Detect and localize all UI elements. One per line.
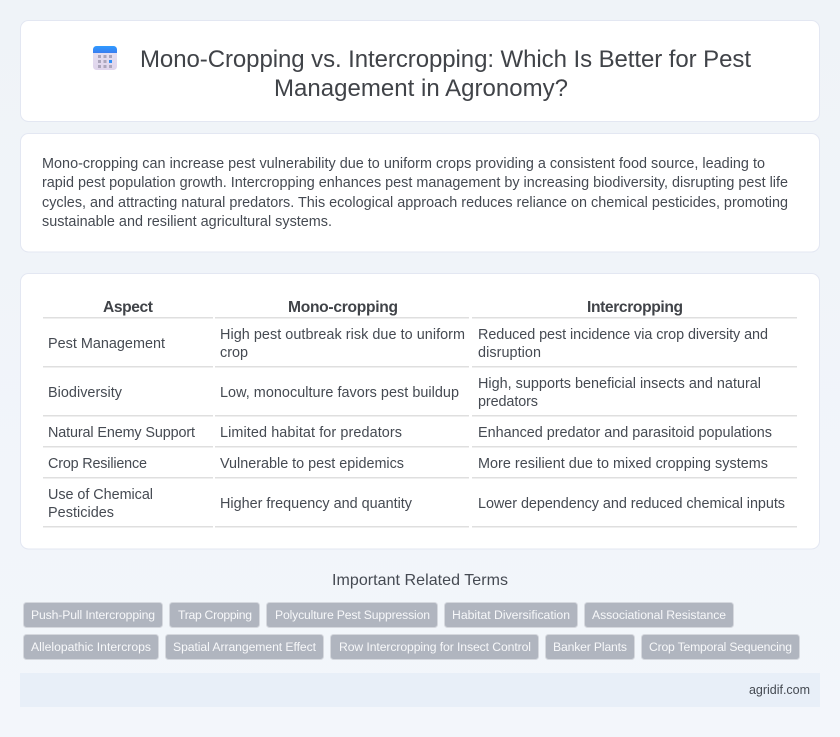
- table row: pest management: crop: [220, 345, 248, 361]
- text block: summary paragraph: sustainable and resilient agricultural systems.: [42, 214, 332, 230]
- table row: natural enemy support: Enhanced predator and parasitoid populations: [478, 425, 772, 441]
- tag list: related terms: Row Intercropping for Insect Control: [339, 640, 531, 654]
- title: Mono-Cropping vs. Intercropping: Which Is Better for Pest: [140, 46, 751, 73]
- tag list: related terms: Allelopathic Intercrops: [31, 640, 151, 654]
- table row: pest management: High pest outbreak risk due to uniform: [220, 327, 465, 343]
- table header row: Intercropping: [587, 299, 683, 316]
- table row: biodiversity: Low, monoculture favors pest buildup: [220, 385, 459, 401]
- table header row: [103, 299, 683, 316]
- table row: pest management: Pest Management: [48, 336, 165, 352]
- title: [140, 46, 751, 102]
- table header row: Aspect: [103, 299, 153, 316]
- panel: title header: [20, 20, 820, 122]
- table row: pest management: [48, 327, 768, 361]
- table row: chemical pesticides: Use of Chemical: [48, 487, 153, 503]
- table row: chemical pesticides: Higher frequency and quantity: [220, 496, 413, 512]
- tag list: related terms: Push-Pull Intercropping: [31, 608, 155, 622]
- footer: [20, 673, 820, 707]
- title: Management in Agronomy?: [274, 75, 568, 102]
- table row: natural enemy support: Limited habitat for predators: [220, 425, 402, 441]
- tag list: related terms: [24, 602, 800, 660]
- heading: important related terms: Important Related Terms: [332, 572, 508, 589]
- table header row: Mono-cropping: [288, 299, 398, 316]
- panel: comparison table: [20, 274, 820, 549]
- text block: summary paragraph: rapid pest population growth. Intercropping enhances pest management by increasing biodiversity, disrupting pest life: [42, 175, 788, 191]
- table row: biodiversity: Biodiversity: [48, 385, 123, 401]
- table row: chemical pesticides: Pesticides: [48, 505, 114, 521]
- tag list: related terms: Spatial Arrangement Effect: [173, 640, 317, 654]
- table row: natural enemy support: Natural Enemy Support: [48, 425, 195, 441]
- table row: biodiversity: High, supports beneficial insects and natural: [478, 376, 761, 392]
- text block: summary paragraph: Mono-cropping can increase pest vulnerability due to uniform crops providing a consistent food source, leading to: [42, 156, 765, 172]
- tag list: related terms: Banker Plants: [553, 640, 627, 654]
- tag list: related terms: Associational Resistance: [592, 608, 726, 622]
- text block: summary paragraph: cycles, and attracting natural predators. This ecological approach reduces reliance on chemical pesticides, promoting: [42, 195, 788, 211]
- table row: chemical pesticides: Lower dependency and reduced chemical inputs: [478, 496, 785, 512]
- icon: calendar: [93, 46, 117, 70]
- tag list: related terms: Trap Cropping: [178, 608, 252, 622]
- table row: crop resilience: More resilient due to mixed cropping systems: [478, 456, 768, 472]
- footer: agridif.com: [749, 683, 810, 697]
- table row: biodiversity: [48, 376, 761, 410]
- table row: biodiversity: predators: [478, 394, 538, 410]
- panel: description: [20, 134, 820, 252]
- tag list: related terms: Crop Temporal Sequencing: [649, 640, 792, 654]
- tag list: related terms: Habitat Diversification: [452, 608, 570, 622]
- table row: natural enemy support: [48, 425, 772, 441]
- table row: pest management: Reduced pest incidence via crop diversity and: [478, 327, 768, 343]
- tag list: related terms: Polyculture Pest Suppression: [275, 608, 430, 622]
- text block: summary paragraph: [42, 156, 788, 230]
- table row: chemical pesticides: [48, 487, 785, 521]
- table row: crop resilience: Crop Resilience: [48, 456, 147, 472]
- table row: pest management: disruption: [478, 345, 541, 361]
- table row: crop resilience: [48, 456, 768, 472]
- table row: crop resilience: Vulnerable to pest epidemics: [220, 456, 404, 472]
